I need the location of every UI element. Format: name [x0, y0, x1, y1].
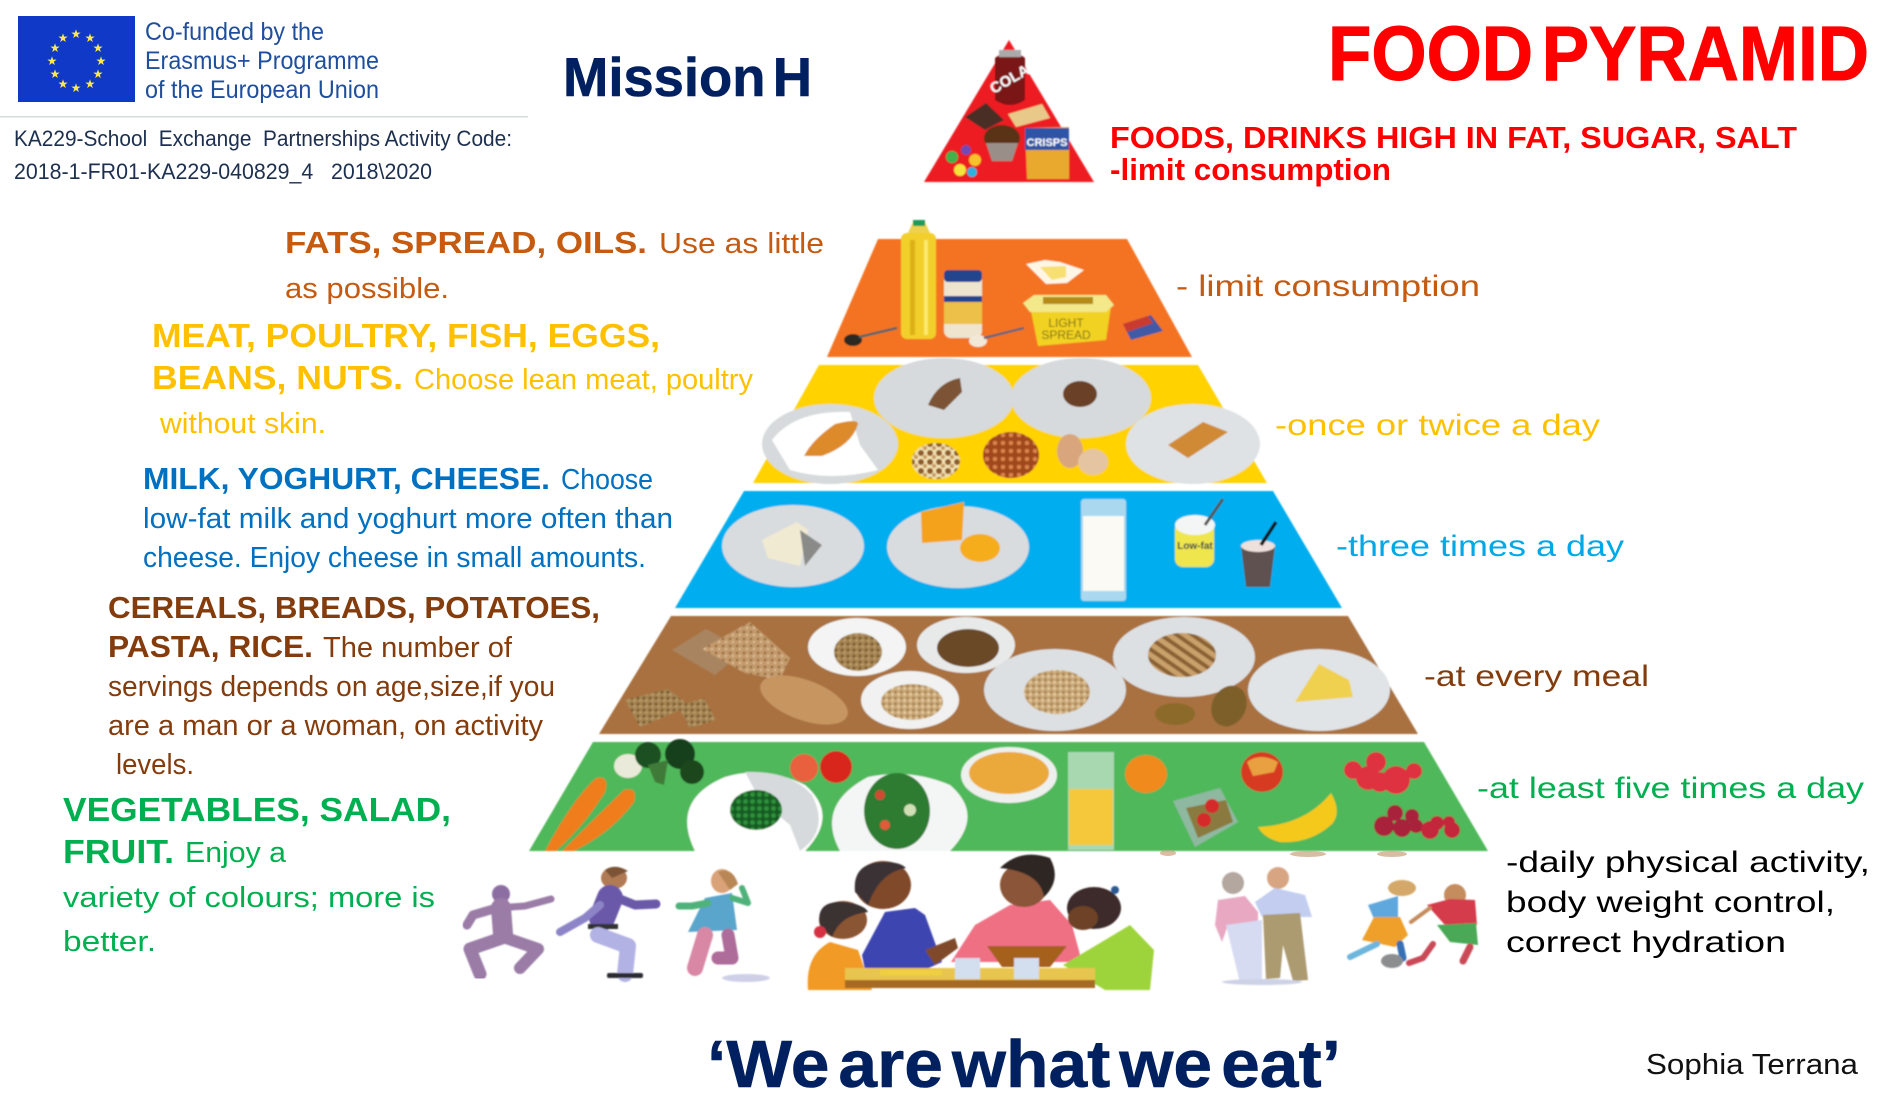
icon: tomatoes [790, 751, 852, 783]
illustration: children playing football [1350, 880, 1478, 968]
pyramid tier: treats [924, 40, 1094, 182]
icon: butter [1026, 260, 1084, 284]
plate: potatoes [1248, 649, 1390, 731]
text block: fats: Use as little [659, 228, 824, 260]
icon: cherries [1374, 805, 1460, 839]
label: dairy frequency: -three times a day [1336, 530, 1624, 563]
illustration: dancing woman [679, 869, 770, 982]
icon: crisps bag: CRISPS [1027, 137, 1067, 149]
icon: biscuit [1008, 104, 1050, 127]
icon: bread slices [672, 622, 790, 680]
EU flag logo: ★ [58, 77, 68, 91]
plate: chicken [762, 404, 898, 484]
bowl: vegetable soup [961, 747, 1057, 803]
icon: banana [1258, 793, 1337, 842]
pyramid tier: cereals [599, 616, 1418, 735]
icon: glass of milk [1081, 499, 1126, 601]
icon: pitta bread [754, 665, 854, 735]
label: lifestyle: body weight control, [1506, 886, 1835, 919]
text block: vegetables [63, 791, 451, 958]
label: fats frequency: - limit consumption [1176, 270, 1480, 303]
text block: fats [285, 225, 824, 305]
funding statement [145, 18, 379, 104]
EU flag logo: ★ [58, 31, 68, 45]
label: lifestyle: -daily physical activity, [1506, 846, 1870, 879]
author credit: Sophia Terrana [1646, 1049, 1859, 1081]
icon: spread tub [1023, 295, 1114, 346]
pyramid tier: vegetables and fruit [529, 739, 1488, 851]
bowl: rice [861, 671, 959, 729]
icon: oil bottle [901, 220, 936, 339]
EU flag logo: ★ [93, 67, 103, 81]
icon: mayonnaise jar [944, 270, 982, 338]
text block: dairy: cheese. Enjoy cheese in small amounts. [143, 542, 646, 574]
icon: orange [1125, 755, 1167, 793]
label: treats [1110, 120, 1797, 187]
illustration: dancing silhouette [467, 885, 551, 974]
label: treats: -limit consumption [1110, 152, 1391, 187]
label: lifestyle: correct hydration [1506, 926, 1786, 959]
plate: grains [984, 649, 1126, 731]
illustration: dancing man [560, 867, 656, 978]
icon: crackers [625, 689, 716, 728]
icon: chocolate drink [1241, 522, 1276, 587]
icon: strawberries [1344, 752, 1422, 794]
text block: meat: without skin. [159, 408, 326, 440]
illustration: family at table [808, 855, 1154, 990]
label: cereals frequency: -at every meal [1424, 660, 1649, 693]
activity code: KA229-School Exchange Partnerships Activity Code: [14, 126, 512, 151]
EU flag logo: ★ [47, 54, 57, 68]
icon: cola can: COLA [987, 61, 1033, 98]
icon: sweets [946, 145, 981, 177]
EU flag logo: ★ [93, 41, 103, 55]
EU flag logo: ★ [71, 27, 81, 41]
icon: muffin [984, 125, 1020, 161]
text block: vegetables: VEGETABLES, SALAD, [63, 791, 451, 828]
plate: salmon [1126, 404, 1260, 484]
figure: father [855, 861, 958, 972]
EU flag logo: ★ [50, 67, 60, 81]
text block: meat [152, 317, 753, 440]
plate: peas [687, 772, 822, 851]
tier labels right [1176, 270, 1864, 805]
label: treats: FOODS, DRINKS HIGH IN FAT, SUGAR, SALT [1110, 120, 1797, 155]
text block: meat: Choose lean meat, poultry [414, 364, 753, 396]
label: lifestyle [1506, 846, 1870, 959]
plate: salad [832, 773, 968, 851]
icon: spoon left [844, 328, 897, 346]
EU flag logo: ★ [85, 31, 95, 45]
icon: potatoes [1155, 680, 1253, 732]
illustration: elderly couple [1215, 867, 1312, 985]
pyramid tier: fats [827, 220, 1192, 357]
text block: dairy: low-fat milk and yoghurt more often than [143, 503, 673, 535]
plate: brie [722, 505, 864, 587]
icon: crisps bag [1025, 127, 1069, 179]
icon: fruit box [1173, 788, 1238, 847]
text block: meat: BEANS, NUTS. [152, 359, 403, 396]
icon: chocolate [965, 103, 1004, 130]
funding statement: Erasmus+ Programme [145, 47, 379, 75]
icon: broccoli [614, 739, 704, 785]
text block: fats: as possible. [285, 273, 449, 305]
text block: vegetables: better. [63, 926, 156, 958]
text block: cereals: The number of [323, 632, 513, 664]
icon: spread tub: SPREAD [1041, 328, 1091, 342]
text block: vegetables: Enjoy a [185, 837, 287, 869]
EU flag logo: ★ [96, 54, 106, 68]
pyramid tier: dairy [675, 491, 1342, 608]
table [845, 946, 1095, 988]
icon: cola can [987, 50, 1033, 105]
text block: cereals: are a man or a woman, on activity [108, 710, 543, 742]
text block: vegetables: FRUIT. [63, 833, 174, 870]
figure: girl right [1063, 886, 1154, 990]
text block: fats: FATS, SPREAD, OILS. [285, 225, 647, 260]
text block: meat: MEAT, POULTRY, FISH, EGGS, [152, 317, 660, 354]
text block: cereals: CEREALS, BREADS, POTATOES, [108, 590, 600, 625]
figure: mother [951, 855, 1082, 962]
plate: beef [874, 358, 1014, 438]
icon: spread pack [1123, 315, 1163, 340]
bowl: flakes [917, 617, 1015, 673]
funding statement: Co-funded by the [145, 18, 324, 46]
text block: cereals: levels. [116, 749, 194, 781]
pyramid tier: meat [753, 358, 1267, 484]
EU flag logo [18, 16, 135, 102]
activity code [14, 126, 512, 184]
bowl: cereal [808, 618, 906, 676]
residue under green tier [1160, 850, 1407, 857]
text block: cereals: servings depends on age,size,if you [108, 671, 555, 703]
icon: spread tub: LIGHT [1048, 316, 1084, 330]
label: meat frequency: -once or twice a day [1275, 409, 1600, 442]
icon: yoghurt pot [1175, 499, 1223, 567]
icon: carrots [545, 778, 635, 851]
icon: orange juice [1068, 752, 1114, 850]
figure: child left [808, 901, 872, 990]
icon: spoon right [969, 328, 1024, 347]
EU flag logo: ★ [85, 77, 95, 91]
text block: cereals: PASTA, RICE. [108, 629, 313, 664]
heading: Mission H: Mission H [563, 46, 812, 108]
icon: eggs [1057, 434, 1108, 475]
plate: steak [1011, 358, 1151, 438]
EU flag logo: ★ [50, 41, 60, 55]
label: vegetables frequency: -at least five times a day [1477, 772, 1864, 805]
text block: cereals [108, 590, 600, 781]
plate: pasta [1113, 617, 1255, 697]
text block: dairy [143, 461, 673, 574]
text block: dairy: MILK, YOGHURT, CHEESE. [143, 461, 550, 496]
icon: yoghurt pot: Low-fat [1177, 541, 1213, 552]
icon: nuts [912, 443, 960, 479]
text block: dairy: Choose [561, 464, 653, 496]
activity code: 2018-1-FR01-KA229-040829_4 2018\2020 [14, 159, 432, 184]
EU flag logo: ★ [71, 81, 81, 95]
icon: baked beans [983, 432, 1039, 478]
text block: vegetables: variety of colours; more is [63, 882, 435, 914]
icon: apple [1241, 752, 1283, 792]
plate: cheddar [887, 502, 1029, 588]
funding statement: of the European Union [145, 76, 379, 104]
